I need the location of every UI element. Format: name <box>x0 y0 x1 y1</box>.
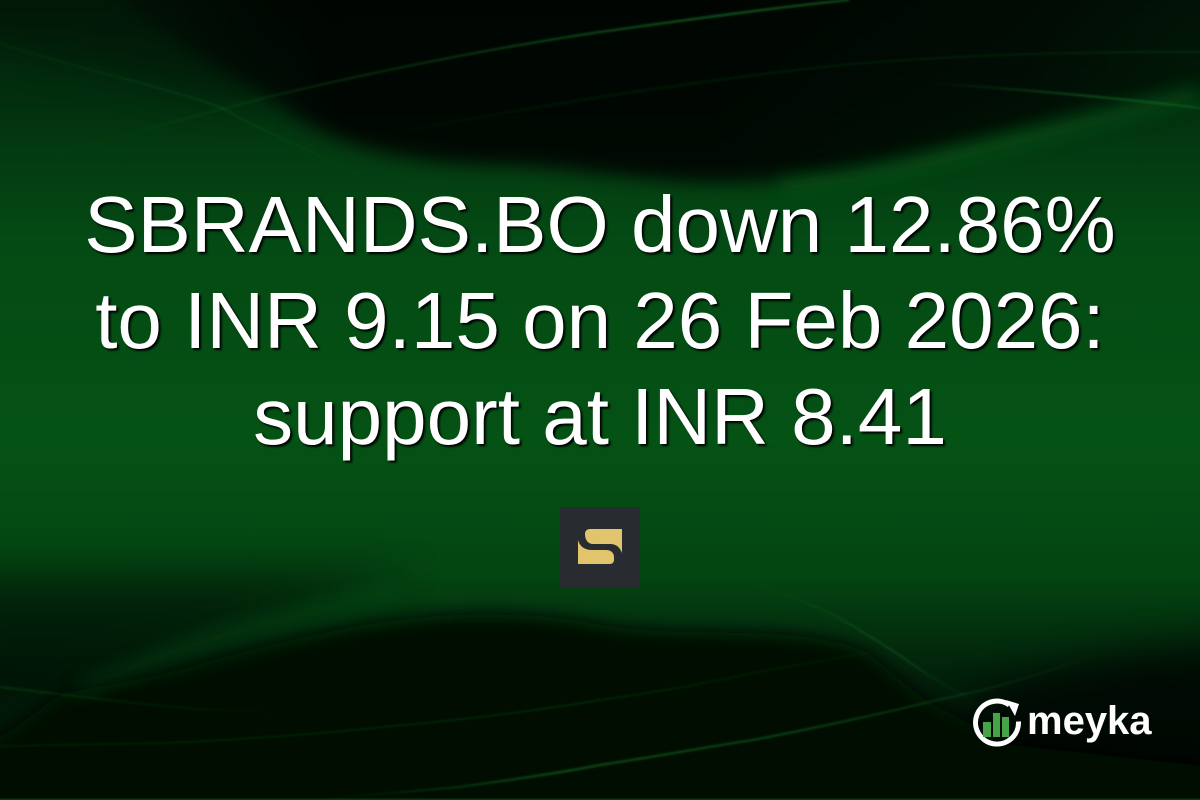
title: to INR 9.15 on 26 Feb 2026: <box>95 276 1105 365</box>
top dark bowl <box>120 0 1200 182</box>
title: support at INR 8.41 <box>253 372 947 461</box>
title <box>84 180 1116 464</box>
wordmark: meyka <box>1027 699 1152 743</box>
title: SBRANDS.BO down 12.86% <box>84 180 1116 269</box>
bottom dark hill <box>0 615 1200 800</box>
logo: meyka <box>973 698 1152 746</box>
glow band under bowl <box>780 92 1200 185</box>
soft dark washes <box>0 0 320 99</box>
icon: meyka chart ring <box>976 700 1019 744</box>
icon: SBRANDS logo <box>560 507 640 587</box>
